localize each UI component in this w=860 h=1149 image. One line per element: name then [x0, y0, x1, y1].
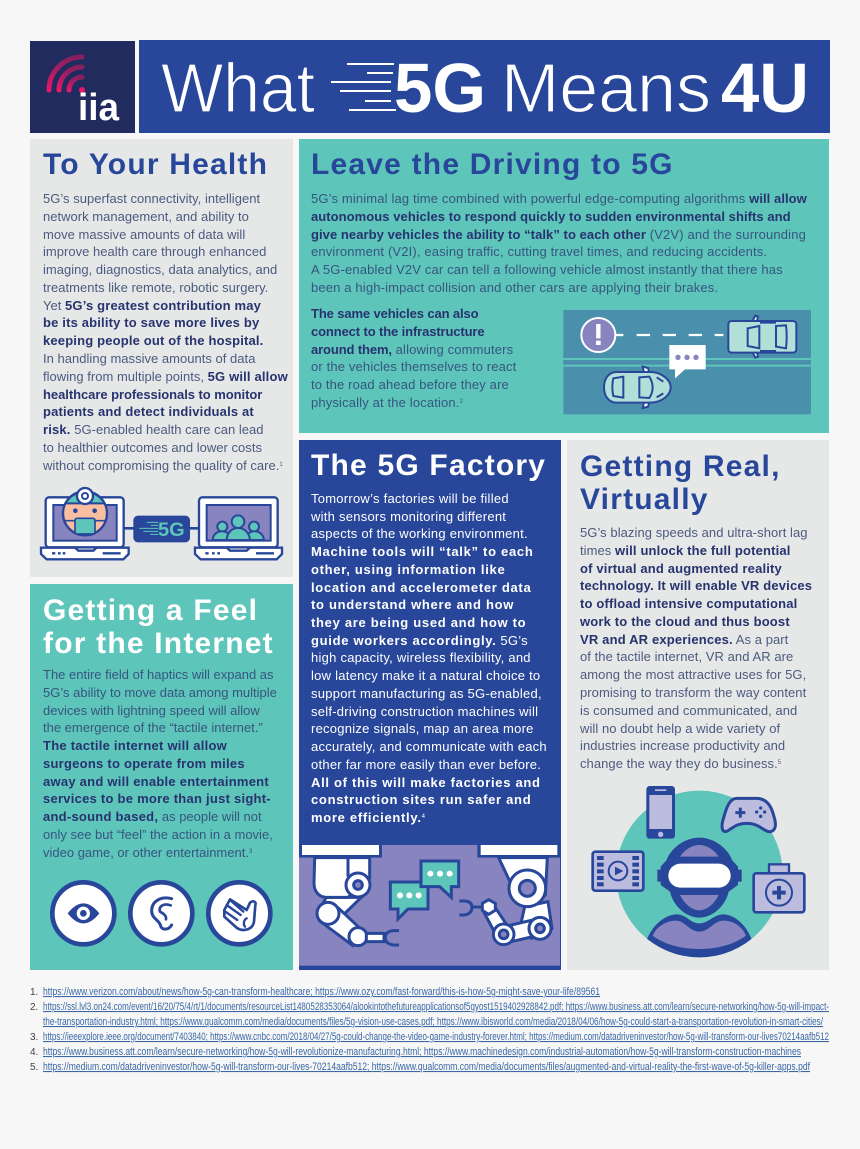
text: driving infrastructure	[311, 306, 516, 410]
icon: medical kit	[754, 864, 804, 912]
icon: hand	[208, 882, 270, 944]
text: health body: keeping people out of the hospital.	[43, 333, 263, 348]
icon: doctor laptop	[41, 488, 129, 559]
text: factory body: other, using information like	[311, 562, 505, 577]
text: factory body: construction sites run safer and	[311, 792, 531, 807]
text: factory body: with sensors monitoring different	[311, 509, 506, 524]
icon: speech bubble	[669, 345, 706, 378]
icon: 5G badge	[133, 516, 190, 542]
title banner: 5G	[394, 49, 486, 127]
text: health body: risk. 5G-enabled health care can lead	[43, 422, 263, 437]
text: haptics body: the emergence of the “tactile internet.”	[43, 720, 263, 735]
icon: following car	[604, 367, 671, 408]
text: health body: without compromising the quality of care.1	[43, 458, 283, 473]
text: health body: flowing from multiple points, 5G will allow	[43, 369, 288, 384]
text: haptics body	[43, 667, 277, 860]
icon: left robot arm	[299, 835, 399, 946]
text: driving intro: 5G’s minimal lag time combined with powerful edge-computing algorithms will allow	[311, 191, 807, 206]
text: factory body: Machine tools will “talk” to each	[311, 544, 533, 559]
text: health body: treatments like remote, robotic surgery.	[43, 280, 268, 295]
footnotes: 2.	[30, 1002, 38, 1013]
icon: speech bubbles	[390, 861, 459, 919]
text: health body: to healthier outcomes and lower costs	[43, 440, 262, 455]
text: factory body: recognize signals, map an area more	[311, 721, 534, 736]
text: haptics body: surgeons to operate from miles	[43, 756, 245, 771]
text: health body: move massive amounts of data will	[43, 227, 245, 242]
footnotes: 1.	[30, 987, 38, 998]
footnotes: 4.	[30, 1047, 38, 1058]
text: factory body: self-driving construction machines will	[311, 704, 538, 719]
text: VR body: will no doubt help a wide variety of	[580, 721, 780, 736]
text: VR body: technology. It will enable VR devices	[580, 578, 812, 593]
text: factory body: to understand where and how	[311, 597, 514, 612]
text: haptics body: 5G’s ability to move data among multiple	[43, 685, 277, 700]
icon: right robot arm	[459, 835, 560, 945]
text: health body: patients and detect individuals at	[43, 404, 254, 419]
text: VR body: of virtual and augmented reality	[580, 561, 782, 576]
text: driving intro	[311, 191, 807, 295]
text: factory body	[311, 491, 547, 825]
text: haptics body: The tactile internet will allow	[43, 738, 227, 753]
text: driving intro: A 5G-enabled V2V car can tell a following vehicle almost instantly that there has	[311, 262, 783, 277]
text: VR body: 5G’s blazing speeds and ultra-short lag	[580, 525, 808, 540]
text: factory body: guide workers accordingly. 5G’s	[311, 633, 528, 648]
icons: senses	[50, 880, 273, 947]
icon: phone	[646, 786, 675, 839]
title banner: Means	[501, 49, 711, 127]
text: health body: imaging, diagnostics, data analytics, and	[43, 262, 277, 277]
title banner: What	[161, 49, 315, 127]
illustration: VR headset and uses	[591, 786, 806, 958]
heading: getting a feel: Getting a Feel	[43, 594, 258, 627]
text: VR body	[580, 525, 812, 771]
text: VR body: VR and AR experiences. As a part	[580, 632, 788, 647]
text: driving infrastructure: physically at the location.2	[311, 395, 463, 410]
text: driving intro: been a high-impact collision and other cars are applying their brakes.	[311, 280, 718, 295]
text: factory body: high capacity, wireless flexibility, and	[311, 650, 531, 665]
text: health body: network management, and ability to	[43, 209, 249, 224]
text: health body	[43, 191, 288, 473]
panel: getting real, virtually	[567, 440, 829, 970]
text: factory body: support manufacturing as 5G-enabled,	[311, 686, 542, 701]
text: VR body: work to the cloud and thus boost	[580, 614, 790, 629]
text: VR body: promising to transform the way content	[580, 685, 806, 700]
text: VR body: among the most attractive uses for 5G,	[580, 667, 806, 682]
text: driving infrastructure: The same vehicles can also	[311, 306, 478, 321]
text: health body: healthcare professionals to monitor	[43, 387, 262, 402]
heading: leave the driving to 5G: Leave the Driving to 5G	[311, 148, 674, 181]
illustration: road with connected cars	[563, 310, 811, 414]
footnotes	[30, 986, 829, 1073]
icon: patients laptop	[195, 497, 282, 559]
text: health body: Yet 5G’s greatest contribution may	[43, 298, 261, 313]
text: factory body: they are being used and how to	[311, 615, 526, 630]
heading: the 5G factory: The 5G Factory	[311, 449, 546, 482]
footnotes: 5.	[30, 1062, 38, 1073]
footnotes: 3.	[30, 1032, 38, 1043]
text: driving infrastructure: to the road ahead before they are	[311, 377, 509, 392]
heading: getting a feel: for the Internet	[43, 627, 274, 660]
icon: video film	[593, 852, 643, 891]
icon: eye	[52, 882, 114, 944]
text: VR body: of the tactile internet, VR and AR are	[580, 649, 793, 664]
illustration: doctor and patients connected by 5G	[40, 486, 284, 560]
heading: to your health: To Your Health	[43, 148, 268, 181]
logo panel	[30, 41, 135, 133]
text: VR body: to offload intensive computational	[580, 596, 797, 611]
text: VR body: is consumed and communicated, and	[580, 703, 797, 718]
heading: getting real, virtually: Getting Real,	[580, 450, 781, 483]
text: VR body: times will unlock the full potential	[580, 543, 791, 558]
icon: alert	[581, 318, 723, 352]
text: VR body: change the way they do business.5	[580, 756, 781, 771]
icon: person with headset	[647, 838, 752, 958]
text: driving infrastructure: around them, allowing commuters	[311, 342, 513, 357]
icon: ear	[130, 882, 192, 944]
heading: getting real, virtually	[580, 450, 781, 516]
connector line	[123, 524, 200, 532]
text: driving intro: give nearby vehicles the ability to “talk” to each other (V2V) and the surrounding	[311, 227, 806, 242]
text: driving intro: autonomous vehicles to respond quickly to sudden environmental shifts and	[311, 209, 791, 224]
icon: car ahead	[728, 316, 796, 358]
text: health body: improve health care through enhanced	[43, 244, 266, 259]
text: driving infrastructure: or the vehicles themselves to react	[311, 359, 516, 374]
text: health body: In handling massive amounts of data	[43, 351, 255, 366]
footnotes: https://www.verizon.com/about/news/how-5g-can-transform-healthcare; https://www.ozy.com/fast-forward/this-is-how-5g-might-save-your-life/89561	[43, 986, 600, 998]
text: factory body: accurately, and communicate with each	[311, 739, 547, 754]
icon: game controller	[722, 798, 775, 832]
text: factory body: other far more easily than ever before.	[311, 757, 541, 772]
panel: leave the driving to 5G	[299, 139, 829, 433]
icon: 5G badge: 5G	[158, 520, 185, 541]
text: haptics body: The entire field of haptics will expand as	[43, 667, 274, 682]
illustration: robot arms talking	[299, 845, 560, 966]
title banner	[139, 40, 830, 133]
text: haptics body: and-sound based, as people will not	[43, 809, 262, 824]
text: haptics body: away and will enable entertainment	[43, 774, 269, 789]
text: haptics body: services to be more than just sight-	[43, 791, 271, 806]
text: driving infrastructure: connect to the infrastructure	[311, 324, 484, 339]
panel: to your health	[30, 139, 293, 577]
text: factory body: low latency make it a natural choice to	[311, 668, 540, 683]
text: factory body: more efficiently.4	[311, 810, 425, 825]
text: factory body: Tomorrow’s factories will be filled	[311, 491, 509, 506]
text: health body: be its ability to save more lives by	[43, 315, 259, 330]
text: VR body: industries increase productivity and	[580, 738, 785, 753]
text: driving intro: environment (V2I), easing traffic, cutting travel times, and reducing accidents.	[311, 244, 767, 259]
panel: the 5G factory	[299, 440, 561, 970]
text: factory body: location and accelerometer data	[311, 580, 531, 595]
text: haptics body: video game, or other entertainment.3	[43, 845, 252, 860]
title banner: 4U	[721, 49, 809, 127]
panel: getting a feel for the internet	[30, 584, 293, 970]
text: health body: 5G’s superfast connectivity, intelligent	[43, 191, 260, 206]
text: factory body: All of this will make factories and	[311, 774, 541, 790]
logo panel: iia	[78, 87, 120, 129]
text: haptics body: devices with lightning speed will allow	[43, 703, 260, 718]
heading: getting real, virtually: Virtually	[580, 483, 709, 516]
heading: getting a feel	[43, 594, 274, 660]
text: haptics body: only see but “feel” the action in a movie,	[43, 827, 273, 842]
text: factory body: aspects of the working environment.	[311, 526, 528, 541]
